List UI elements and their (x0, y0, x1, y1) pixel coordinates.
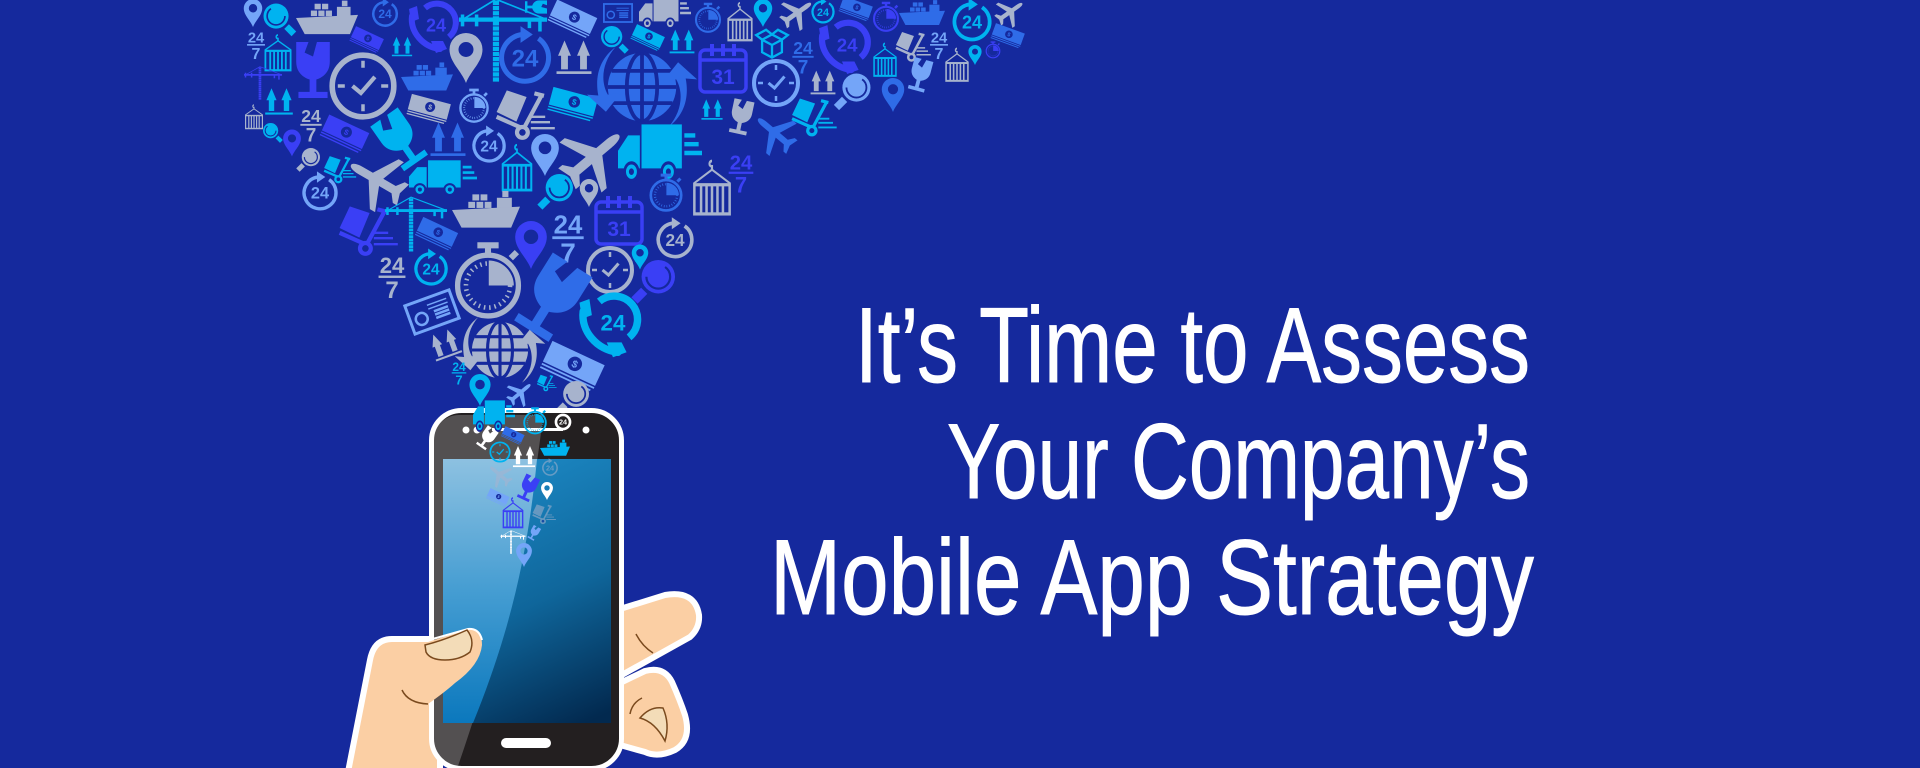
icon: money (839, 0, 873, 21)
icon: 24 hour loop: 24 (817, 7, 829, 19)
icon: dolly (896, 32, 931, 60)
icon: ship (452, 191, 520, 228)
icon: truck (409, 160, 477, 195)
icon: money (548, 0, 597, 38)
icon: 24 hour loop (502, 26, 549, 81)
icon: plane (546, 110, 640, 204)
screen reflection (443, 459, 537, 723)
thumb top highlight (429, 629, 482, 640)
icon: 24/7: 24 (730, 152, 753, 174)
title line 3: Mobile App Strategy (770, 517, 1534, 637)
icon: 24/7: 7 (455, 372, 463, 387)
icon: pin (754, 0, 772, 27)
icon: arrows (431, 123, 465, 156)
icon: 24/7: 7 (306, 126, 316, 147)
icon: 24/7 (247, 30, 265, 63)
icon: 24 hour phone: 24 (426, 16, 446, 36)
icon: dolly (497, 90, 555, 138)
icon: 24/7 (300, 106, 322, 147)
icon: calendar: 31 (711, 66, 735, 89)
icon: pin (580, 179, 598, 207)
icon: 24/7: 7 (252, 46, 261, 63)
icon: 24 hour loop: 24 (665, 230, 685, 250)
icon: glass (511, 253, 593, 343)
icon: magnifier (263, 123, 281, 141)
icon: ship (899, 0, 945, 25)
icon: container (728, 3, 752, 40)
icon: 24 hour loop: 24 (512, 45, 539, 72)
icon: stopwatch (651, 175, 681, 210)
icon: arrows (811, 71, 835, 94)
icon: 24 hour phone (819, 23, 868, 74)
icon: 24/7: 24 (452, 360, 466, 374)
icon: money (320, 114, 369, 153)
icon: 24 hour phone (409, 4, 456, 53)
icon: magnifier (635, 260, 675, 300)
icon: stopwatch (874, 3, 898, 31)
index finger (620, 594, 699, 676)
icon: 24 hour loop (416, 248, 446, 284)
icon: container (503, 498, 523, 527)
icon: money (407, 94, 451, 124)
icon: pin (968, 45, 982, 65)
icon: glass (296, 42, 330, 98)
icon cloud: logistics icons spraying out of the phone (244, 0, 1031, 412)
icon: plane (774, 0, 820, 36)
bezel reflection (433, 415, 543, 766)
icon: 24/7: 7 (798, 58, 808, 79)
icon: plane (337, 140, 417, 220)
title (770, 285, 1534, 637)
icon: stopwatch (524, 408, 546, 433)
icon: 24 hour loop (304, 171, 336, 209)
icon: container (874, 44, 896, 76)
icon: 24 hour loop: 24 (422, 261, 440, 278)
icon: 24/7: 7 (560, 238, 576, 269)
middle finger (620, 670, 687, 755)
icon: container (502, 145, 532, 190)
icon: 24 hour phone (579, 296, 638, 357)
icon: arrows (392, 37, 412, 56)
icon: 24 hour phone: 24 (837, 35, 858, 56)
icon: ship (401, 62, 453, 91)
icon: ship (296, 1, 358, 34)
icon: plane (483, 458, 517, 492)
icon: 24/7: 24 (380, 253, 405, 278)
icon: pin (632, 244, 648, 270)
icon: arrows (557, 41, 591, 74)
icon: 24 hour loop (658, 217, 692, 257)
icon: stopwatch (986, 42, 1000, 58)
thumb shape (428, 629, 482, 704)
icon: truck (473, 400, 515, 431)
icon: arrows (265, 88, 293, 115)
icon: glass (907, 57, 933, 93)
phone body (432, 410, 622, 768)
thumb nail (425, 630, 472, 660)
icon: crane (385, 197, 447, 252)
icon: 24 hour loop (813, 0, 834, 22)
icon: plane (501, 374, 539, 412)
icon: 24 hour loop (373, 0, 397, 26)
icon: glass (727, 98, 755, 136)
icon: money (415, 217, 458, 251)
icon: money (540, 341, 605, 391)
icon: 24/7: 24 (301, 106, 321, 126)
icon: 24 hour loop: 24 (480, 138, 498, 155)
icon: magnifier (298, 148, 320, 170)
icon: clock (332, 55, 394, 117)
icon: money (350, 26, 384, 53)
icon: dolly (533, 504, 556, 523)
icon: open box (756, 30, 788, 58)
icon: money (631, 24, 665, 51)
icon: money (501, 426, 525, 445)
icon: pin (882, 78, 904, 112)
icon: container (245, 105, 263, 129)
creases (630, 634, 653, 714)
icon: clock (754, 61, 798, 105)
icon: magnifier (836, 74, 870, 108)
icon: 24/7 (729, 152, 753, 197)
icon: 24 hour phone: 24 (601, 311, 626, 336)
icon: arrows (701, 99, 723, 120)
icon: arrows (513, 446, 535, 467)
icon: 24/7: 24 (931, 30, 948, 46)
icon: 24/7: 24 (554, 212, 583, 240)
icon: 24/7: 7 (735, 172, 747, 197)
icon: magnifier (540, 174, 573, 207)
speaker and sensor dots (462, 426, 590, 434)
icon: glass (475, 425, 499, 451)
title line 2: Your Company’s (947, 401, 1530, 521)
icon: crane (244, 67, 282, 100)
icon: magnifier (558, 381, 589, 412)
icon: 24/7 (792, 38, 814, 79)
icon: 24 hour loop: 24 (378, 7, 392, 21)
icons leaving the phone screen (473, 400, 571, 567)
icon: pin (244, 0, 262, 27)
icon: pin (531, 134, 559, 176)
icon: money (548, 87, 598, 121)
icon: 24/7 (930, 30, 948, 63)
phone (432, 410, 622, 768)
icon: calendar: 31 (607, 218, 631, 241)
icon: stopwatch (696, 4, 720, 32)
hand behind the phone: palm and fingers (348, 594, 699, 768)
icon: 24 hour loop (474, 125, 504, 161)
icon: money (486, 488, 510, 507)
icon: dolly (340, 206, 398, 254)
icon: stopwatch (458, 245, 518, 316)
icon: calendar (596, 196, 642, 244)
icon: pin (283, 130, 301, 156)
icon: glass (516, 474, 540, 502)
icon: 24/7: 24 (793, 38, 813, 58)
icon: 24 hour loop: 24 (962, 12, 982, 32)
icon: 24 hour loop: 24 (546, 464, 555, 473)
icon: clock (490, 442, 510, 462)
icon: crane (500, 530, 526, 554)
icon: 24/7 (552, 212, 584, 269)
thumb over the phone (402, 629, 482, 704)
icon: 24 hour phone: 24 (559, 418, 567, 427)
icon: 24/7: 24 (248, 30, 265, 46)
icon: dolly (792, 98, 837, 135)
icon: card (604, 4, 632, 22)
icon: truck (618, 124, 702, 180)
icon: pin (541, 482, 553, 500)
icon: 24/7: 7 (385, 277, 399, 304)
icon: plane (745, 103, 805, 163)
icon: 24 hour loop (543, 458, 557, 475)
icon: pin (450, 33, 482, 83)
icon: 24/7 (379, 253, 405, 304)
nail (640, 708, 667, 741)
icon: arrows (427, 327, 462, 362)
icon: truck (639, 0, 691, 28)
title line 1: It’s Time to Assess (855, 285, 1530, 405)
icon: dolly (324, 156, 356, 182)
icon: globe (587, 47, 697, 127)
icon: globe (455, 317, 545, 383)
home button (501, 738, 551, 748)
icon: stopwatch (460, 90, 488, 122)
icon: container (694, 161, 730, 214)
icon: 24 hour loop: 24 (311, 185, 329, 203)
finger nail and creases (630, 634, 667, 741)
icon: glass (525, 0, 547, 14)
icon: clock (588, 248, 632, 292)
icon: glass (370, 107, 430, 173)
icon: magnifier (601, 26, 627, 52)
icon: money (991, 23, 1025, 48)
icon: 24 hour loop (954, 0, 990, 39)
icon: crane (459, 0, 547, 83)
palm (348, 639, 440, 768)
icon: 24 hour phone (555, 414, 571, 430)
icon: dolly (537, 375, 557, 391)
icon: ship (540, 440, 570, 456)
icon: calendar (700, 44, 746, 92)
icon: pin (515, 221, 547, 269)
icon: pin (516, 543, 532, 567)
icon: pin (469, 374, 491, 406)
icon: arrows (670, 30, 694, 53)
icon: plane (989, 0, 1031, 32)
icon: 24/7: 7 (935, 46, 944, 63)
icon: container (265, 35, 291, 70)
icon: glass (527, 525, 541, 541)
icon: card (405, 290, 459, 334)
icon: 24/7 (452, 360, 466, 387)
icon: magnifier (264, 3, 294, 34)
icon: container (946, 48, 968, 81)
thumb crease (402, 690, 428, 704)
screen (443, 459, 611, 723)
